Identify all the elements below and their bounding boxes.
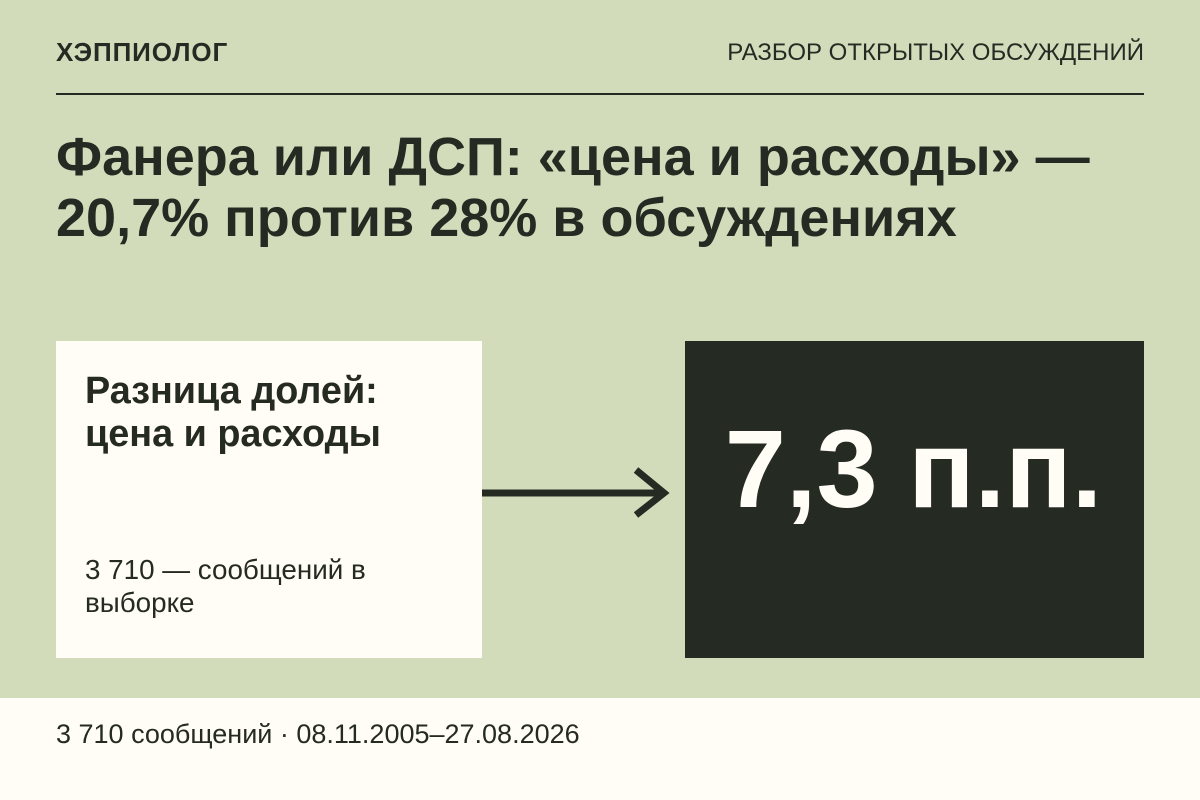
footer band: [0, 698, 1200, 800]
panel heading: [85, 370, 381, 455]
panel heading: Разница долей:: [85, 370, 378, 412]
footer source text: 3 710 сообщений · 08.11.2005–27.08.2026: [56, 719, 580, 749]
brand name: ХЭППИОЛОГ: [56, 37, 228, 67]
big number: 7,3 п.п.: [725, 408, 1102, 531]
header rule: [56, 93, 1144, 95]
panel heading: цена и расходы: [85, 413, 381, 455]
panel: metric description: [56, 341, 482, 658]
sample size note: выборке: [85, 587, 195, 618]
sample size note: [85, 554, 366, 618]
arrow: [482, 467, 670, 518]
panel: result value: [685, 341, 1144, 658]
section label: РАЗБОР ОТКРЫТЫХ ОБСУЖДЕНИЙ: [727, 39, 1144, 66]
title: 20,7% против 28% в обсуждениях: [56, 188, 957, 248]
sample size note: 3 710 — сообщений в: [85, 554, 366, 585]
title: [56, 127, 1090, 248]
title: Фанера или ДСП: «цена и расходы» —: [56, 127, 1090, 187]
